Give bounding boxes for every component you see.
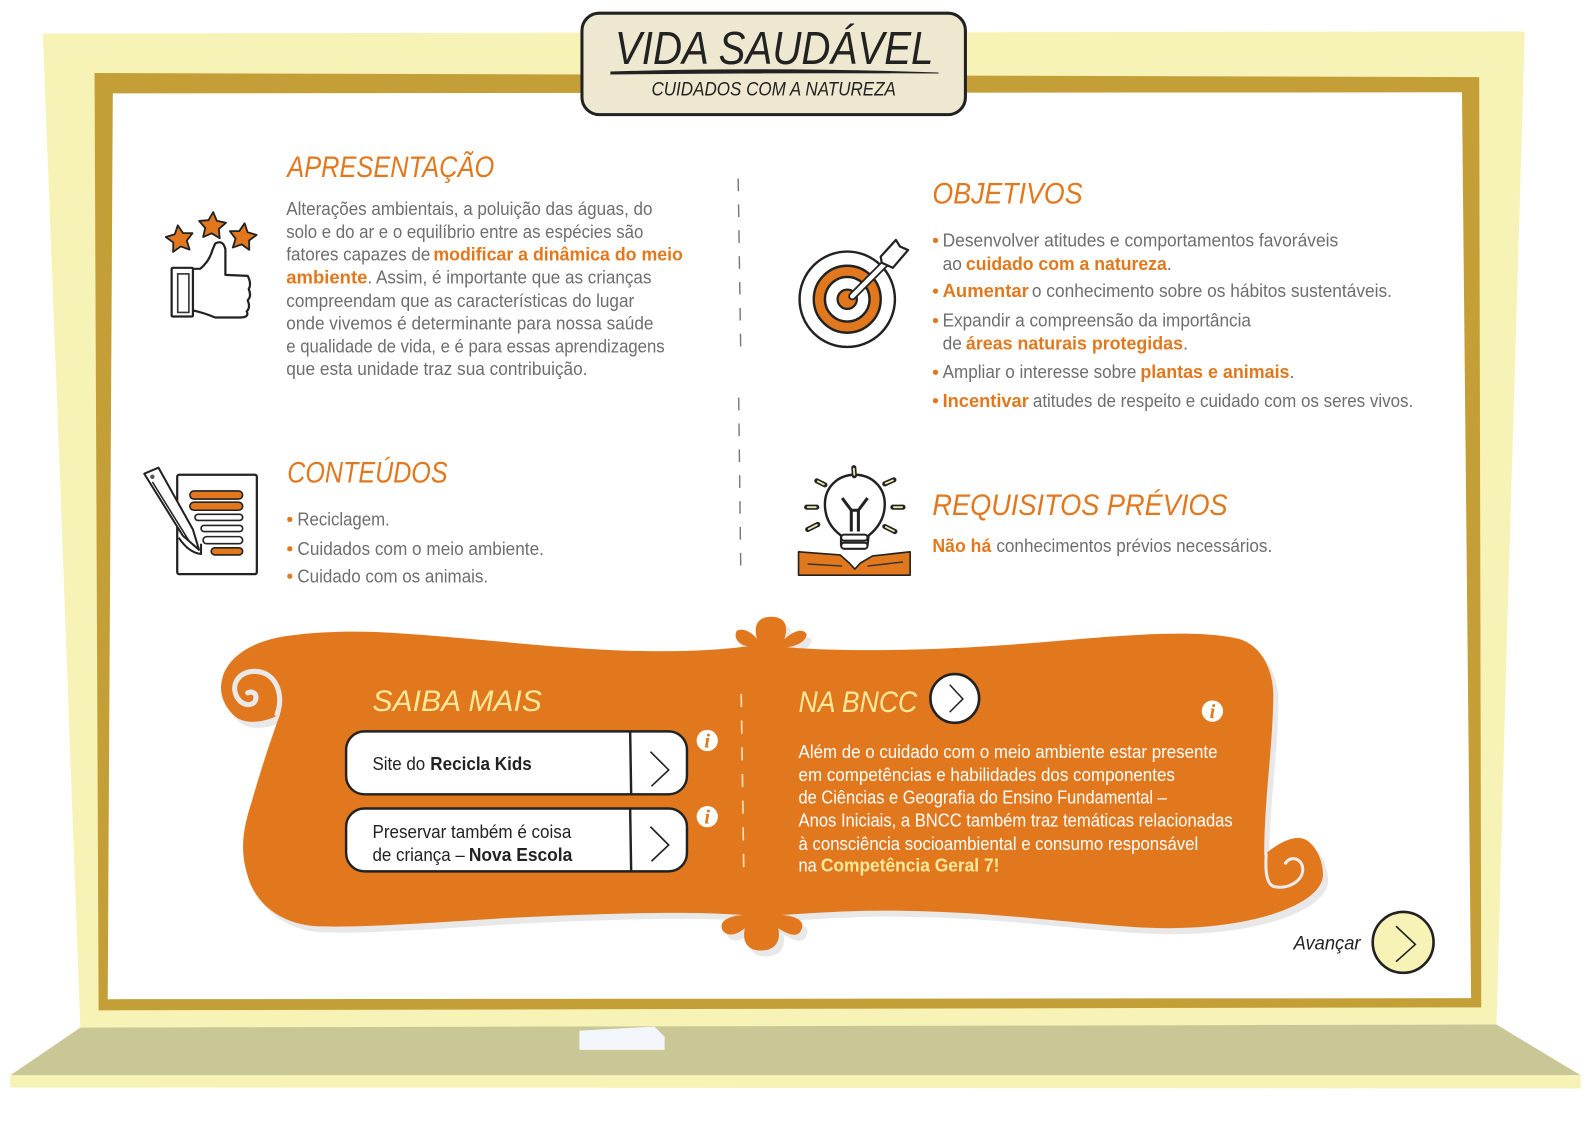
table surface bbox=[10, 1025, 1581, 1088]
button: recicla kids: Site do bbox=[372, 753, 425, 774]
list: de bbox=[943, 332, 962, 353]
paragraph: modificar a dinâmica do meio bbox=[433, 244, 683, 265]
heading: OBJETIVOS bbox=[932, 177, 1083, 210]
next button bbox=[1293, 912, 1434, 973]
button: nova escola: Nova Escola bbox=[469, 844, 573, 865]
button: nova escola: de criança – bbox=[372, 844, 466, 865]
bncc text: Além de o cuidado com o meio ambiente estar presente bbox=[799, 741, 1217, 762]
list: Desenvolver atitudes e comportamentos favoráveis bbox=[943, 230, 1338, 251]
bncc text: em competências e habilidades dos componentes bbox=[799, 764, 1175, 785]
list: Cuidados com o meio ambiente. bbox=[297, 538, 544, 559]
panel: orange scroll bbox=[221, 617, 1328, 957]
list: . bbox=[1183, 332, 1188, 353]
list: Reciclagem. bbox=[297, 508, 390, 529]
button: bncc circle bbox=[930, 674, 979, 723]
list: Ampliar o interesse sobre bbox=[943, 361, 1136, 382]
heading: APRESENTAÇÃO bbox=[286, 150, 494, 184]
heading: CONTEÚDOS bbox=[287, 456, 448, 489]
na bncc heading: NA BNCC bbox=[799, 686, 918, 719]
icon: info 2: i bbox=[704, 807, 710, 829]
button: recicla kids: Recicla Kids bbox=[430, 753, 532, 774]
paragraph bbox=[286, 198, 683, 379]
icon: document and pencil bbox=[144, 468, 257, 574]
paragraph: ambiente bbox=[286, 267, 367, 288]
section: objetivos bbox=[932, 177, 1413, 411]
heading: REQUISITOS PRÉVIOS bbox=[932, 489, 1228, 522]
button: nova escola: Preservar também é coisa bbox=[372, 821, 572, 842]
bncc text bbox=[799, 741, 1233, 875]
paragraph: . Assim, é importante que as crianças bbox=[367, 267, 651, 288]
list: ao bbox=[943, 253, 962, 274]
icon: info 3: i bbox=[1210, 701, 1216, 723]
button: recicla kids bbox=[346, 731, 687, 794]
list: . bbox=[1290, 361, 1295, 382]
icon: light bulb over book bbox=[799, 468, 910, 575]
icon: target with arrow bbox=[800, 240, 908, 347]
list: plantas e animais bbox=[1140, 361, 1290, 382]
list: áreas naturais protegidas bbox=[966, 332, 1183, 353]
paragraph: compreendam que as características do lugar bbox=[286, 290, 634, 311]
list bbox=[933, 230, 1413, 411]
list bbox=[287, 508, 544, 586]
list: Expandir a compreensão da importância bbox=[943, 310, 1252, 331]
list: cuidado com a natureza bbox=[966, 253, 1168, 274]
section: conteúdos bbox=[287, 456, 544, 586]
board frame bbox=[95, 73, 1481, 1010]
list: atitudes de respeito e cuidado com os seres vivos. bbox=[1033, 390, 1413, 411]
list: Incentivar bbox=[943, 390, 1029, 411]
board white area bbox=[108, 92, 1471, 999]
title plaque bbox=[582, 13, 965, 115]
list: . bbox=[1167, 253, 1172, 274]
icon: info 2 bbox=[697, 806, 718, 829]
bncc text: Anos Iniciais, a BNCC também traz temáticas relacionadas bbox=[799, 810, 1233, 831]
paragraph: e qualidade de vida, e é para essas aprendizagens bbox=[286, 336, 665, 357]
icon: info 3 bbox=[1202, 700, 1223, 723]
paragraph: Alterações ambientais, a poluição das águas, do bbox=[286, 198, 652, 219]
text: Não há bbox=[932, 535, 992, 556]
section: requisitos prévios bbox=[932, 489, 1272, 556]
bncc text: de Ciências e Geografia do Ensino Fundamental – bbox=[799, 786, 1168, 807]
icon: info 1: i bbox=[704, 731, 710, 753]
button: nova escola bbox=[346, 808, 687, 871]
paragraph: fatores capazes de bbox=[286, 244, 430, 265]
list: Aumentar bbox=[943, 280, 1029, 301]
paragraph: que esta unidade traz sua contribuição. bbox=[286, 358, 588, 379]
list: Cuidado com os animais. bbox=[297, 565, 488, 586]
paragraph: onde vivemos é determinante para nossa saúde bbox=[286, 313, 653, 334]
icon: thumbs up with stars bbox=[164, 211, 258, 318]
chalk bbox=[579, 1027, 665, 1050]
bncc text: Competência Geral 7! bbox=[821, 854, 999, 875]
label: avançar: Avançar bbox=[1293, 933, 1362, 954]
title: VIDA SAUDÁVEL bbox=[615, 22, 933, 74]
bncc text: à consciência socioambiental e consumo responsável bbox=[799, 833, 1198, 854]
section: apresentação bbox=[286, 150, 683, 379]
bncc text: na bbox=[799, 854, 818, 875]
list: o conhecimento sobre os hábitos sustentáveis. bbox=[1032, 280, 1392, 301]
saiba mais heading: SAIBA MAIS bbox=[372, 685, 542, 718]
subtitle: CUIDADOS COM A NATUREZA bbox=[651, 79, 896, 100]
text: conhecimentos prévios necessários. bbox=[996, 535, 1272, 556]
paragraph: solo e do ar e o equilíbrio entre as espécies são bbox=[286, 221, 643, 242]
icon: info 1 bbox=[697, 730, 718, 753]
